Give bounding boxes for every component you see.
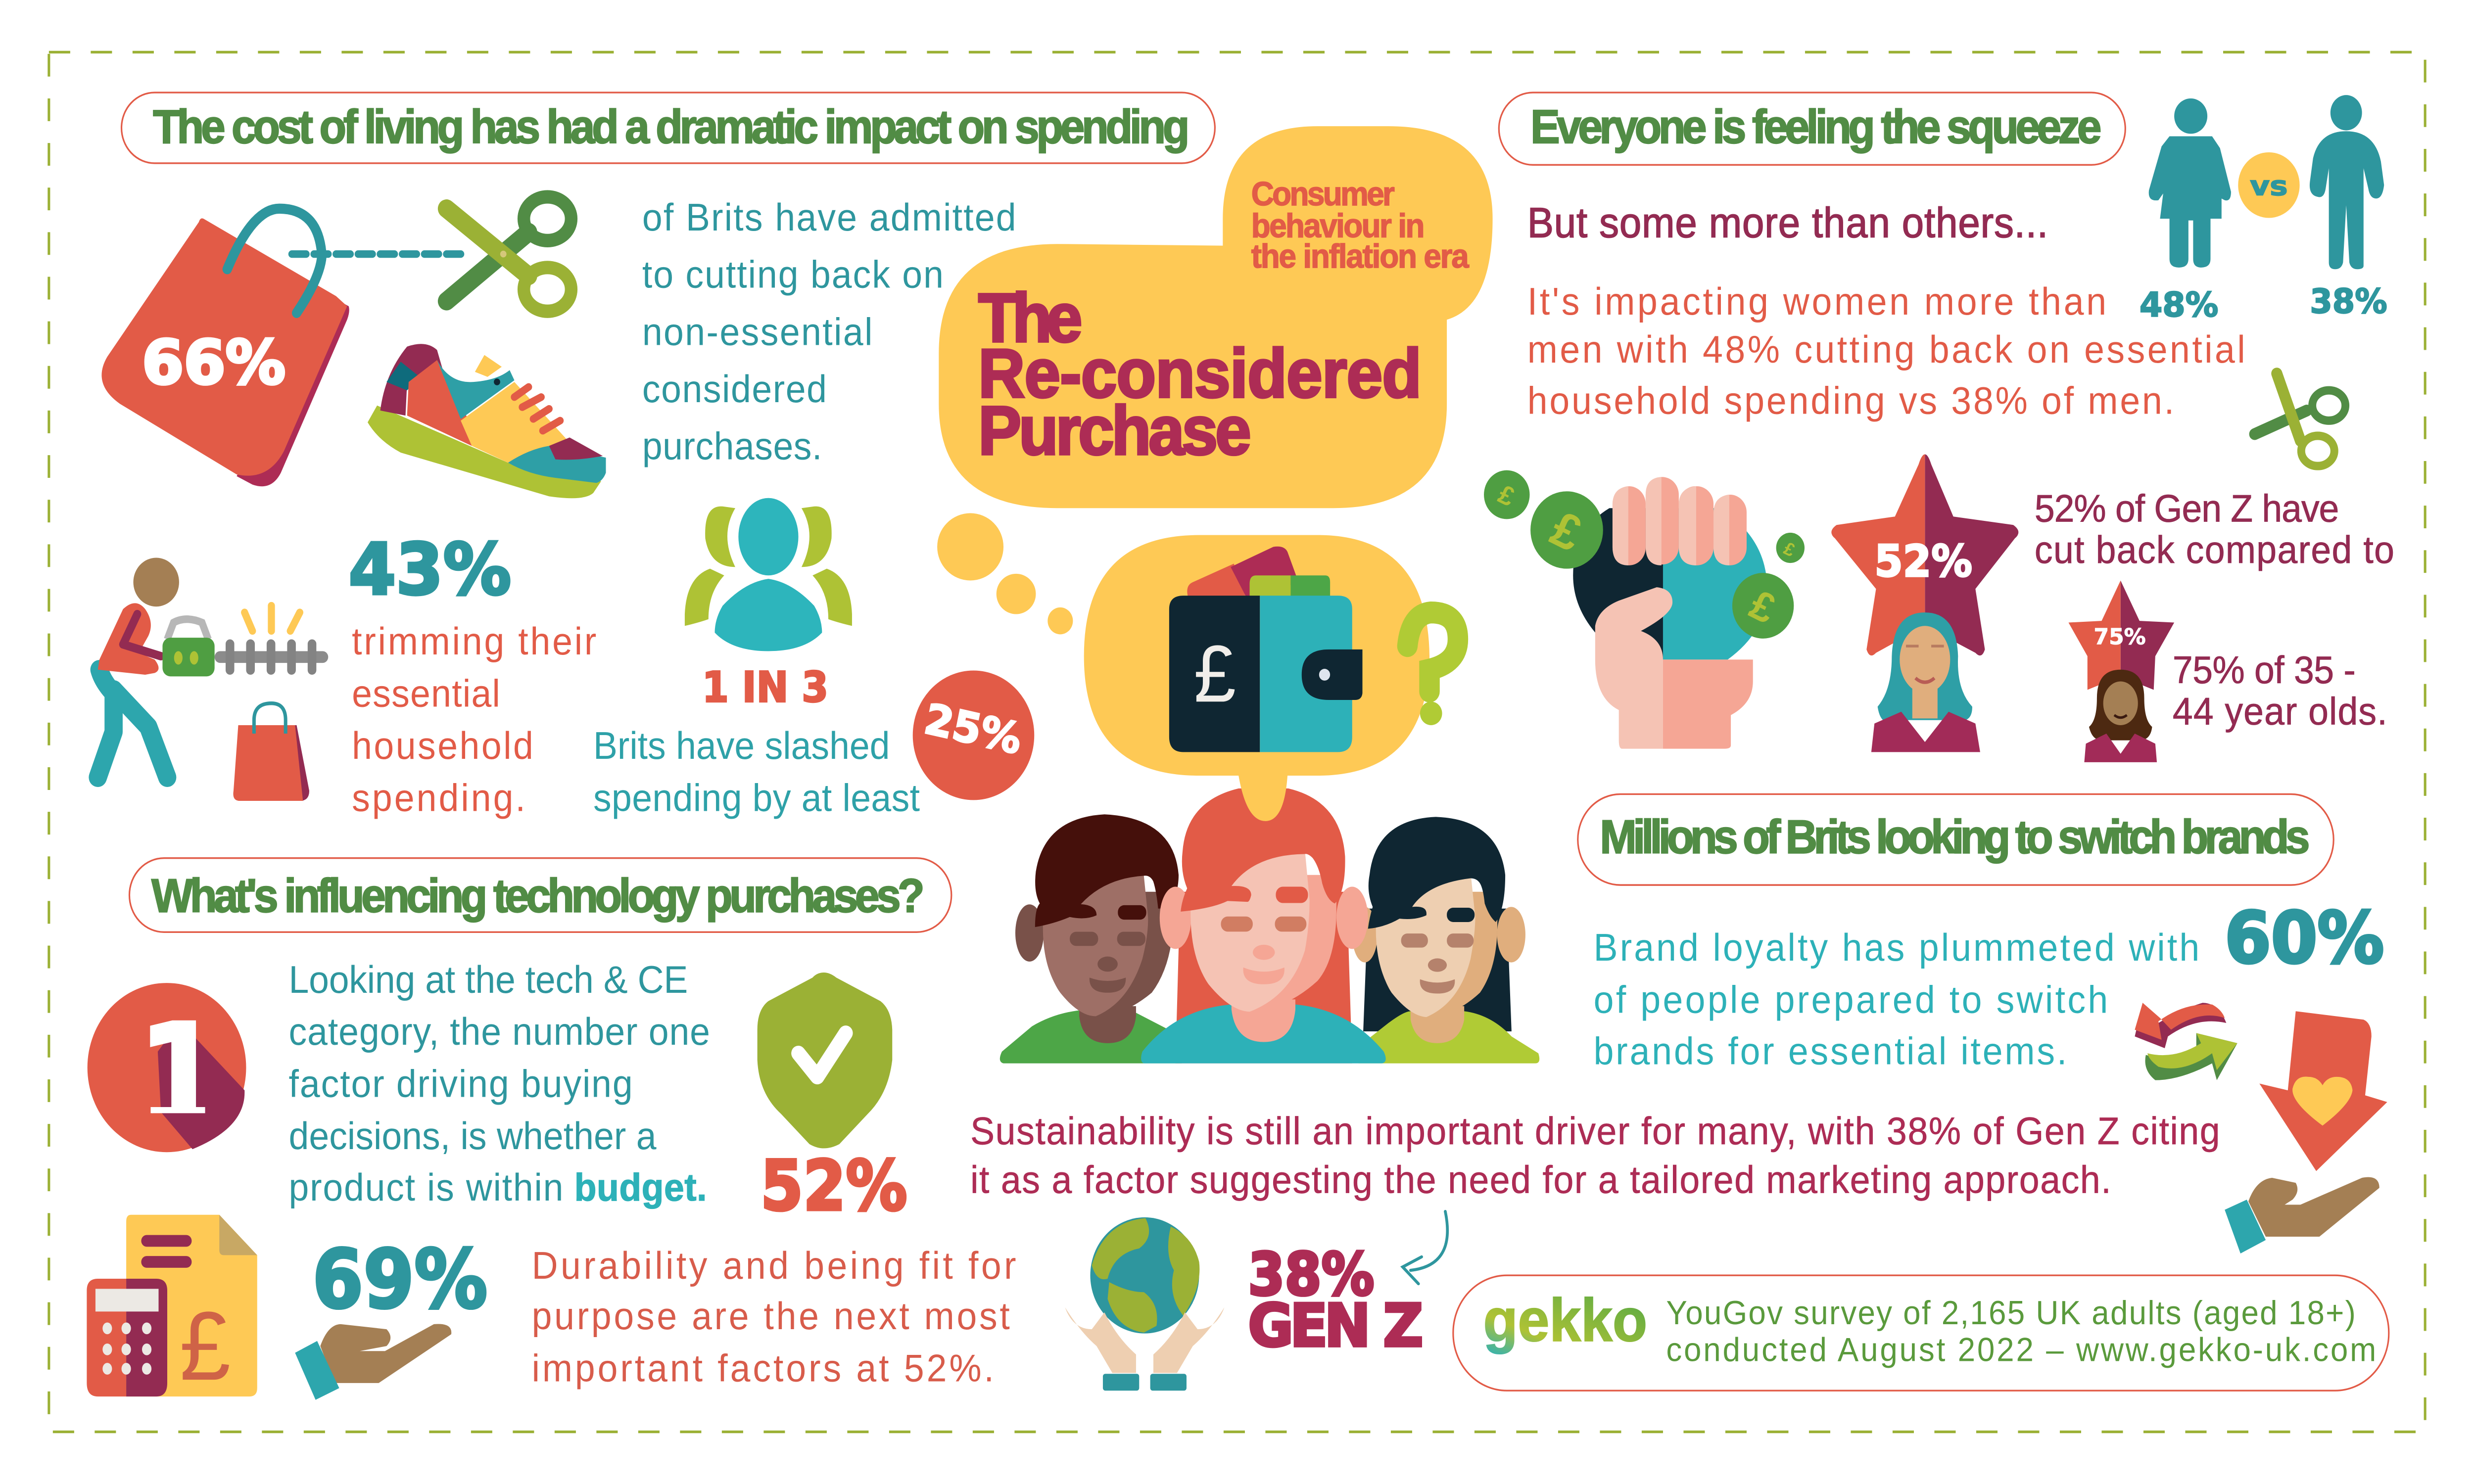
three people: [1000, 788, 1539, 1064]
icon: person with hedge trimmer: [98, 558, 328, 777]
text: Brits have slashed: [593, 724, 920, 820]
heading: technology purchases: What's influencing technology purchases?: [151, 869, 925, 922]
text: Brits cutting back: purchases.: [642, 424, 822, 468]
icon: scissors: [446, 197, 571, 311]
icon: question mark: [1407, 612, 1458, 725]
stats: 48% and 38%: 48%: [2140, 285, 2218, 325]
icon: star 52% with woman: [1831, 454, 2018, 752]
thought bubbles: [937, 513, 1073, 634]
heading: everyone: [1499, 93, 2125, 165]
icon: switch arrows: [2135, 1003, 2237, 1080]
text: sustainability: Sustainability is still an important driver for many, with 38% of Gen Z citing: [970, 1110, 2220, 1153]
text: brand loyalty: brands for essential items.: [1594, 1029, 2067, 1073]
icon: fist with money: £: [1494, 479, 1519, 512]
icon: shopping bag 66%: [101, 209, 349, 486]
text: survey source: conducted August 2022 – www.gekko-uk.com: [1666, 1331, 2376, 1368]
icon: fist with money: £: [1743, 581, 1782, 633]
icon: heart down arrow and hand: [2225, 1011, 2387, 1253]
text: durability: Durability and being fit for: [532, 1244, 1016, 1288]
arrow: curved: [1403, 1211, 1447, 1284]
text: Brits cutting back: to cutting back on: [642, 253, 944, 296]
icon: shield check: [758, 973, 892, 1148]
text: Brits cutting back: non-essential: [642, 310, 872, 354]
icon: shopping bag 66%: 66%: [142, 327, 285, 398]
icon: small shopping bag: [233, 703, 309, 801]
title bubble: [939, 126, 1493, 508]
icon: small scissors: [2255, 373, 2345, 466]
text: durability: important factors at 52%.: [532, 1346, 994, 1390]
text: trimming spending: household: [352, 724, 533, 768]
title bubble: Consumer: [1251, 175, 1395, 212]
stats: 48% and 38%: [2140, 282, 2387, 325]
vs badge: vs: [2250, 171, 2288, 202]
icon: star 75% with woman: 75%: [2094, 624, 2146, 650]
vs badge: [2238, 152, 2300, 218]
heading: everyone: Everyone is feeling the squeeze: [1530, 100, 2101, 153]
icon: man: [2310, 95, 2384, 269]
text: 75% of 35-44: 75% of 35 -: [2173, 649, 2356, 692]
heading: switch brands: [1578, 794, 2333, 885]
footer pill: [1453, 1275, 2389, 1391]
title bubble: behaviour in: [1251, 207, 1425, 244]
text: durability: purpose are the next most: [532, 1295, 1010, 1338]
text: Brits cutting back: considered: [642, 368, 827, 411]
icon: wallet: [1169, 547, 1363, 752]
text: durability: [532, 1244, 1016, 1390]
text: Brits cutting back: [642, 196, 1016, 468]
icon: star 52% with woman: 52%: [1874, 536, 1972, 587]
text: women vs men: household spending vs 38% of men.: [1527, 379, 2174, 422]
wallet bubble with tail: [1084, 535, 1458, 821]
text: trimming spending: [352, 620, 596, 820]
title bubble: Purchase: [978, 392, 1251, 469]
dashed cut line: [292, 253, 469, 255]
text: Brits have slashed: spending by at least: [593, 776, 920, 820]
icon: fist with money: £: [1781, 538, 1798, 561]
text: survey source: YouGov survey of 2,165 UK adults (aged 18+): [1666, 1294, 2356, 1331]
text: women vs men: [1527, 280, 2245, 422]
text: brand loyalty: Brand loyalty has plummeted with: [1594, 926, 2199, 970]
stat: 60%: 60%: [2225, 896, 2384, 979]
icon: trainer shoe: [368, 344, 606, 498]
stat: 52%: 52%: [761, 1146, 907, 1226]
person: right: [1352, 817, 1539, 1064]
text: 75% of 35-44: 44 year olds.: [2173, 690, 2387, 733]
subheading: some more than others: But some more than others...: [1527, 199, 2048, 246]
person: left: [1000, 814, 1182, 1064]
icon: fist with money: £: [1543, 499, 1590, 562]
text: tech and CE: product is within: [289, 1166, 563, 1209]
icon: hand: [295, 1324, 451, 1400]
icon: fist with money: [1484, 470, 1805, 749]
text: sustainability: [970, 1110, 2220, 1202]
title bubble: Re-considered: [978, 335, 1422, 412]
icon: calculator and bill: £: [180, 1292, 231, 1400]
icon: woman vs man: [2149, 95, 2384, 269]
text: brand loyalty: of people prepared to switch: [1594, 978, 2108, 1021]
text: sustainability: it as a factor suggesting the need for a tailored marketing approach.: [970, 1158, 2111, 1202]
stat: 38% Gen Z: [1248, 1241, 1423, 1360]
title bubble: The: [978, 279, 1083, 356]
icon: wallet: £: [1194, 629, 1236, 719]
stat circle: 25%: [913, 670, 1034, 800]
icon: number one badge: [88, 983, 246, 1161]
stat circle: 25%: 25%: [920, 695, 1026, 764]
text: brand loyalty: [1594, 926, 2199, 1073]
stat: 1 in 3: 1 IN 3: [702, 663, 828, 712]
icon: number one badge: 1: [137, 993, 224, 1161]
stat: 69%: 69%: [312, 1233, 487, 1327]
text: women vs men: It's impacting women more than: [1527, 280, 2106, 324]
text: tech and CE: decisions, is whether a: [289, 1114, 657, 1158]
stat: 43%: 43%: [349, 528, 511, 611]
heading: technology purchases: [129, 858, 952, 932]
title bubble: the inflation era: [1251, 237, 1470, 275]
text: 52% of Gen Z: [2035, 487, 2394, 572]
text: 52% of Gen Z: 52% of Gen Z have: [2035, 487, 2339, 530]
text: trimming spending: spending.: [352, 776, 525, 820]
text: 52% of Gen Z: cut back compared to: [2035, 528, 2394, 572]
text: tech and CE: category, the number one: [289, 1010, 710, 1054]
text: survey source: [1666, 1294, 2376, 1368]
icon: star 75% with woman: [2068, 580, 2174, 762]
text: women vs men: men with 48% cutting back on essential: [1527, 328, 2245, 371]
stat: 38% Gen Z: GEN Z: [1248, 1292, 1423, 1360]
icon: calculator and bill: [87, 1215, 257, 1400]
icon: woman: [2149, 98, 2231, 268]
text: Brits cutting back: of Brits have admitted: [642, 196, 1016, 239]
text: tech and CE: budget.: [574, 1166, 707, 1209]
person: middle: [1141, 788, 1386, 1064]
heading: cost of living: The cost of living has had a dramatic impact on spending: [153, 100, 1189, 153]
icon: group of people: [685, 498, 852, 651]
text: trimming spending: trimming their: [352, 620, 596, 663]
text: trimming spending: essential: [352, 672, 500, 715]
text: Brits have slashed: Brits have slashed: [593, 724, 890, 768]
heading: switch brands: Millions of Brits looking to switch brands: [1600, 810, 2310, 863]
stat: 38% Gen Z: 38%: [1248, 1241, 1374, 1309]
logo: gekko: gekko: [1483, 1287, 1647, 1354]
stats: 48% and 38%: 38%: [2310, 282, 2387, 321]
text: tech and CE: Looking at the tech & CE: [289, 958, 688, 1001]
text: tech and CE: factor driving buying: [289, 1063, 633, 1106]
text: tech and CE: [289, 958, 710, 1209]
icon: globe in hands: [1065, 1217, 1224, 1391]
text: 75% of 35-44: [2173, 649, 2387, 733]
